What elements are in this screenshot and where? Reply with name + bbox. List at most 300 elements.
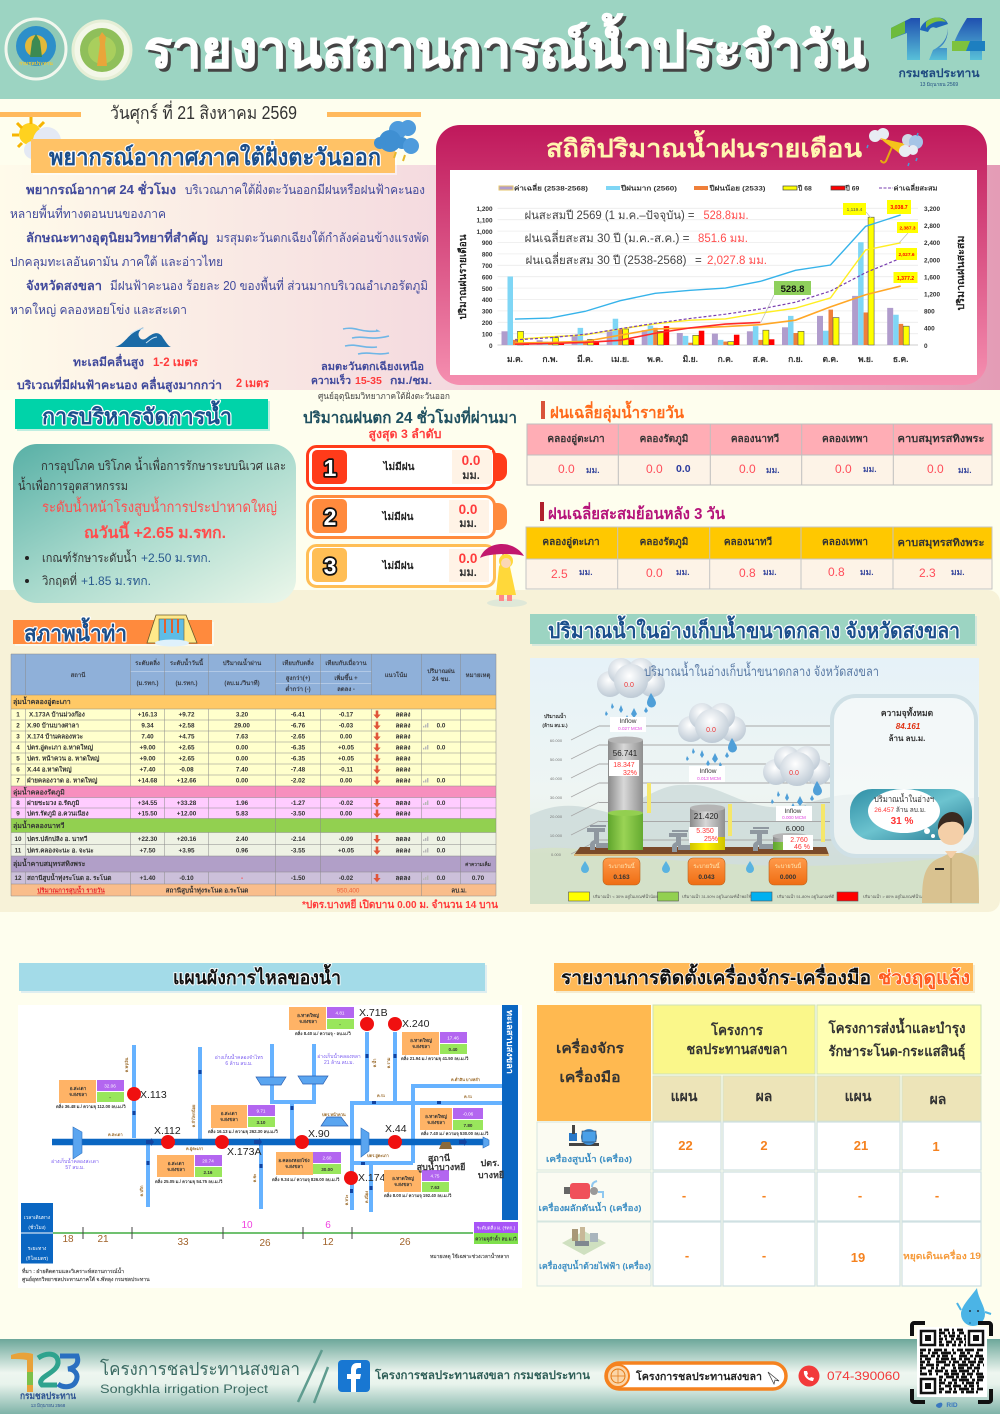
wind text (311, 360, 432, 387)
chart annotations: 528.8มม. (704, 210, 748, 222)
gauge data boxes: ตลิ่ง 8.40 ม./ ความจุ - ลบ.ม./วิ (295, 1030, 351, 1037)
table column headings: โครงการส่งน้ำและบำรุง (828, 1017, 966, 1037)
basin group 2: ปตร.รัตภูมิ อ.ควนเนียง (27, 810, 89, 818)
travel time and distance strip: (กิโลเมตร) (26, 1255, 48, 1262)
gauge points: X.90 (308, 1128, 330, 1140)
table header labels: (ม.รทก.) (136, 680, 159, 687)
reservoir 2 cylinder: 21.420 (694, 812, 719, 821)
left axis: 200 (482, 320, 493, 327)
table header labels: สูงกว่า(+) (286, 675, 310, 683)
strip legend (430, 1222, 518, 1260)
facebook page name: โครงการชลประทานสงขลา กรมชลประทาน (374, 1368, 590, 1382)
basin group 1: 7.40 (236, 766, 249, 774)
gauge data boxes: ตลิ่ง 16.13 ม./ ความจุ 262.30 ลบ.ม./วิ (208, 1128, 278, 1135)
logo: 124 years: 13 มิถุนายน 2569 (920, 81, 958, 88)
speech bubble: ปริมาณน้ำในอ่างฯ (874, 793, 934, 804)
basin group 3 (13, 819, 446, 855)
gauge data boxes: 7.63 (431, 1185, 440, 1190)
chart annotations: 851.6 มม. (698, 233, 748, 245)
chart annotations: ฝนสะสมปี 2569 (1 ม.ค.–ปัจจุบัน) = (524, 209, 695, 222)
volume axis: ปริมาณน้ำ (544, 712, 566, 720)
officer figure (922, 812, 979, 903)
chart legend: ปีฝนน้อย (2533) (709, 184, 766, 192)
table: daily basin rainfall: มม. (863, 464, 877, 474)
table column headings: ผล (756, 1088, 772, 1104)
table: three day rainfall: มม. (951, 567, 965, 577)
rain cloud 2 (678, 703, 746, 767)
gauge points (127, 1007, 430, 1185)
table header labels: เทียบกับตลิ่ง (282, 658, 314, 667)
table header labels: ระดับน้ำวันนี้ (170, 657, 204, 667)
basin group 1: -0.08 (179, 766, 194, 774)
basin group 4: +1.40 (140, 875, 156, 882)
panel: three day accumulated rainfall (526, 502, 992, 589)
travel time and distance strip: 21 (97, 1234, 109, 1245)
gauge data boxes (56, 1007, 489, 1199)
row: water pusher: เครื่องผลักดันน้ำ (เครื่อง) (538, 1201, 642, 1213)
speech bubble (868, 789, 940, 838)
gauge data boxes: อ.สะเดา (70, 1086, 87, 1091)
basin group 1: 7.63 (236, 734, 249, 740)
chart callouts: 528.8 (781, 284, 804, 295)
right axis: 2,400 (924, 240, 940, 247)
logo: 124 years: กรมชลประทาน (898, 67, 980, 80)
chart callouts (761, 200, 918, 322)
panel: reservoir infographic (530, 658, 979, 904)
table header labels: สถานี (71, 671, 86, 679)
reservoir 1 cylinder: 56.741 (613, 749, 638, 758)
gauge data boxes: จ.สงขลา (69, 1092, 87, 1097)
table: daily basin rainfall: คลองรัตภูมิ (640, 433, 688, 446)
wind text: กม./ชม. (390, 375, 432, 387)
month labels (507, 354, 909, 364)
rank 1: 1 (324, 455, 337, 481)
basin group 1: -2.02 (291, 778, 306, 784)
table column headings: ผล (930, 1091, 946, 1107)
rank 1: มม. (462, 470, 480, 482)
volume axis (542, 712, 832, 857)
basin group 1: -6.35 (291, 744, 306, 752)
travel time and distance strip: เวลาเดินทาง (24, 1215, 50, 1221)
travel time and distance strip: (ชั่วโมง) (28, 1224, 46, 1231)
volume axis: 20.000 (550, 814, 563, 819)
gauge points: X.44 (385, 1123, 407, 1135)
reservoir legend: ปริมาณน้ำ > 80% อยู่ในเกณฑ์น้ำมาก (863, 892, 928, 900)
gauge data boxes: อ.คลองหอยโข่ง (278, 1157, 310, 1163)
table: three day rainfall: คาบสมุทรสทิงพระ (898, 537, 984, 549)
basin group 1: +4.75 (179, 734, 195, 740)
chart annotations: 2,027.8 มม. (707, 255, 767, 267)
release buttons: ระบายวันนี้ (608, 862, 635, 870)
month labels: ส.ค. (753, 354, 768, 364)
row: water pusher: - (858, 1188, 862, 1203)
basin group 3: ปตร.ปลักปลิง อ. นาทวี (27, 835, 88, 843)
basin group 4: ค่าความเค็ม (465, 860, 491, 868)
table: daily basin rainfall: มม. (958, 465, 972, 475)
table header labels (71, 657, 490, 693)
panel: water management note: วิกฤตที่ (42, 572, 77, 588)
table column headings: เครื่องมือ (560, 1067, 620, 1085)
gauge data boxes: ตลิ่ง 21.94 ม./ ความจุ 41.50 ลบ.ม./วิ (401, 1055, 469, 1062)
basin group 1: -6.41 (291, 712, 306, 718)
right axis (924, 206, 967, 350)
inflow labels: 0.027 MCM (618, 726, 642, 731)
row: water pump: 21 (854, 1138, 868, 1153)
gauge data boxes: จ.สงขลา (167, 1167, 185, 1172)
basin group 1: 7.40 (141, 734, 154, 740)
month labels: พ.ค. (647, 354, 663, 364)
basin group 2: +34.55 (138, 800, 158, 807)
right axis: ปริมาณฝนสะสม (955, 236, 967, 310)
travel time and distance strip: 33 (177, 1237, 189, 1248)
website pill: โครงการชลประทานสงขลา (635, 1370, 762, 1383)
main river (52, 1054, 489, 1193)
reservoir 1 cylinder: 18.347 (613, 762, 635, 769)
chart callouts: 3,038.7 (890, 205, 908, 211)
daily pumping row: ปริมาณการสูบน้ำ รายวัน (37, 884, 105, 896)
basin group 1: +9.00 (140, 744, 156, 752)
basin group 1: +12.66 (177, 778, 197, 784)
QR code (912, 1323, 991, 1409)
forecast text: หลายพื้นที่ทางตอนบนของภาค (10, 204, 166, 221)
rank 2: 2 (324, 504, 336, 530)
reservoir 3 cylinder: 2.760 (790, 837, 808, 844)
basin group 1 (13, 695, 446, 785)
wave height text: บริเวณที่มีฝนฟ้าคะนอง คลื่นสูงมากกว่า (17, 376, 222, 393)
table: daily basin rainfall: คลองเทพา (822, 434, 868, 445)
panel: water management note: การอุปโภค บริโภค น้ำเพื่อการรักษาระบบนิเวศ และ (41, 456, 286, 474)
gauge data boxes: จ.สงขลา (220, 1117, 238, 1122)
table: three day rainfall: 2.5 (551, 567, 568, 581)
rain cloud 2: 0.0 (706, 727, 716, 734)
decorative slashes (298, 1350, 328, 1403)
title: รายงานสถานการณ์น้ำประจำวัน (144, 13, 866, 78)
bars (502, 217, 909, 345)
basin group 1: 0.0 (437, 778, 446, 784)
left axis: 0 (489, 343, 493, 350)
chart annotations: ฝนเฉลี่ยสะสม 30 ปี (2538-2568) (526, 252, 687, 267)
rank 2: ไม่มีฝน (382, 510, 414, 523)
row: electric pump: หยุดเดินเครื่อง 19 (903, 1249, 981, 1262)
panel: water management note (13, 444, 296, 603)
inflow labels (610, 717, 812, 821)
month labels: เม.ย. (611, 354, 629, 364)
basin group 1: X.174 บ้านคลองหวะ (27, 732, 83, 740)
table header labels: (ลบ.ม./วินาที) (224, 679, 260, 687)
table: river stations (11, 654, 496, 896)
river and reservoir labels: 57 ลบ.ม. (65, 1165, 85, 1171)
right axis: 800 (924, 309, 935, 316)
table: daily basin rainfall: คลองนาทวี (731, 433, 780, 445)
rank 2: 0.0 (459, 502, 477, 517)
table column headings: โครงการ (710, 1021, 763, 1038)
basin group 1: ปตร.อู่ตะเภา อ.หาดใหญ่ (27, 744, 94, 752)
table: three day rainfall: 0.0 (646, 566, 663, 580)
row: electric pump: - (762, 1248, 766, 1263)
daily pumping row: ลบ.ม. (451, 888, 467, 894)
gauge points: X.112 (154, 1125, 181, 1137)
month labels: ก.ย. (788, 354, 803, 364)
gauge data boxes: 3.10 (257, 1120, 266, 1125)
heading: equipment report: รายงานการติดตั้งเครื่องจักร-เครื่องมือ (561, 963, 871, 989)
table header labels: ต่ำกว่า (-) (285, 684, 311, 693)
month labels: ม.ค. (507, 354, 523, 364)
rank 2 (308, 496, 507, 538)
logo: 123 years (11, 1353, 78, 1409)
table: three day rainfall: คลองอู่ตะเภา (542, 536, 600, 549)
basin group 1: +2.58 (179, 722, 195, 730)
gauge data boxes: 9.71 (257, 1108, 266, 1114)
logo: 124 years (891, 17, 985, 88)
basin group 4 (13, 857, 491, 883)
heading: medium reservoirs (530, 614, 977, 646)
basin group 1: 7 (16, 778, 20, 784)
river and reservoir labels: อ่างเก็บน้ำคลองหลา (317, 1051, 361, 1060)
left axis: 1,000 (476, 229, 493, 236)
reservoir 2 cylinder: 5.350 (696, 828, 714, 835)
basin group 1: +2.65 (179, 744, 195, 752)
table header labels: (ม.รทก.) (175, 680, 198, 687)
songkhla lake bar (502, 1005, 518, 1220)
reservoir 2 cylinder: 25% (704, 836, 718, 843)
rank 3: 3 (324, 553, 336, 579)
river and reservoir labels: ค.ชะ (252, 1174, 257, 1182)
gauge points: X.173A (227, 1146, 261, 1158)
gauge points: X.240 (402, 1018, 430, 1030)
basin group 1: +14.68 (138, 778, 158, 784)
wind text: ลมตะวันตกเฉียงเหนือ (321, 360, 424, 373)
basin group 3: +3.95 (179, 848, 195, 854)
volume axis: 0.000 (551, 852, 562, 857)
table: three day rainfall: มม. (579, 567, 593, 577)
volume axis: 60.000 (550, 738, 563, 743)
icon: dam (147, 615, 197, 646)
gauge data boxes: จ.สงขลา (412, 1044, 430, 1049)
project name: Songkhla irrigation Project (100, 1382, 269, 1396)
table: daily basin rainfall: 0.0 (558, 462, 575, 476)
header band (0, 0, 1000, 99)
month labels: ธ.ค. (893, 354, 909, 364)
gauge data boxes: 0.40 (449, 1047, 458, 1052)
basin group 2: +15.50 (138, 810, 158, 818)
panel: water flow diagram (18, 1005, 522, 1288)
basin group 3: +20.16 (177, 836, 197, 843)
basin group 1: 4 (16, 744, 20, 752)
gauge data boxes: อ.หาดใหญ่ (297, 1012, 319, 1019)
chart: rainfall bars and cumulative lines (450, 170, 977, 375)
table: daily basin rainfall: 0.0 (835, 462, 852, 476)
basin group 4: 0.70 (472, 875, 485, 882)
reservoir 1 cylinder (608, 736, 651, 850)
basin group 2: ลดลง (396, 810, 410, 818)
left axis: 900 (482, 240, 493, 247)
panel: water management note: +1.85 ม.รทก. (81, 574, 151, 588)
basin group 1: 29.00 (234, 722, 250, 730)
icon: water pump (569, 1125, 599, 1146)
icon: water pusher (564, 1181, 603, 1199)
basin group 1: 2 (16, 722, 20, 730)
rank 1: ไม่มีฝน (383, 460, 415, 473)
gauge data boxes: 30.00 (321, 1167, 333, 1172)
right axis: 3,200 (924, 206, 940, 213)
release buttons: 0.163 (613, 874, 630, 881)
rain cloud 1: 0.0 (624, 682, 634, 689)
chart legend (499, 182, 938, 192)
river and reservoir labels: ค.จำไทรน้อย (190, 1104, 196, 1127)
wave height text (17, 353, 270, 393)
basin group 2 (13, 786, 446, 818)
basin group 1: 0.00 (340, 734, 353, 740)
basin group 2: +12.00 (177, 810, 197, 818)
left axis: 800 (482, 252, 493, 259)
gauge data boxes: 20.74 (202, 1158, 214, 1164)
basin group 4: สถานีสูบน้ำทุ่งระโนด อ. ระโนด (27, 872, 112, 883)
travel time and distance strip: 26 (259, 1238, 271, 1249)
table header labels: ปริมาณน้ำผ่าน (223, 657, 262, 667)
table: three day rainfall (526, 527, 992, 589)
basin group 3: -2.14 (291, 836, 306, 843)
icon: umbrella with clouds (867, 128, 923, 166)
gauge data boxes: 4.75 (431, 1174, 440, 1178)
row: electric pump (539, 1227, 981, 1272)
panel: three day accumulated rainfall: ฝนเฉลี่ยสะสมย้อนหลัง 3 วัน (548, 502, 725, 523)
reservoir legend (568, 892, 928, 901)
gauge data boxes: ตลิ่ง 25.05 ม./ ความจุ 54.75 ลบ.ม./วิ (155, 1178, 223, 1185)
basin group 1: 0.0 (437, 722, 446, 730)
icon: water drop mascot (957, 1288, 991, 1326)
table header labels: แนวโน้ม (385, 671, 407, 679)
basin group 4: -1.50 (291, 875, 306, 882)
basin group 1: 9.34 (141, 722, 154, 730)
right axis: 0 (924, 343, 928, 350)
chart legend: ค่าเฉลี่ยสะสม (894, 182, 938, 192)
forecast text: มีฝนฟ้าคะนอง ร้อยละ 20 ของพื้นที่ ส่วนมากบริเวณอำเภอรัตภูมิ (110, 276, 428, 294)
basin group 1: ลุ่มน้ำคลองอู่ตะเภา (13, 695, 71, 707)
heading: water management (15, 399, 270, 431)
basin group 3: ปตร.คลองจะนะ อ. จะนะ (27, 846, 94, 854)
river and reservoir labels: ค.สะเดา (108, 1132, 123, 1137)
rank 2: มม. (459, 518, 477, 530)
inflow labels: Inflow (700, 768, 717, 775)
gauge data boxes: 32.06 (104, 1084, 116, 1088)
gauge data boxes: จ.สงขลา (299, 1019, 317, 1024)
left axis: 600 (482, 274, 493, 281)
row: water pusher: - (935, 1188, 939, 1203)
travel time and distance strip (21, 1203, 473, 1264)
wave height text: ทะเลมีคลื่นสูง (73, 353, 144, 370)
river and reservoir labels: ค.พรุเงิน (124, 1057, 130, 1072)
forecast heading (31, 139, 397, 175)
basin group 3: ลดลง (396, 836, 410, 843)
table: three day rainfall: มม. (860, 567, 874, 577)
chart annotations (524, 209, 767, 267)
wind text: 15-35 (355, 375, 382, 387)
table: three day rainfall: คลองนาทวี (724, 536, 773, 548)
basin group 3: ลุ่มน้ำคลองนาทวี (13, 819, 65, 830)
table: three day rainfall: มม. (763, 567, 777, 577)
reservoir 2 cylinder (689, 804, 732, 850)
table: daily basin rainfall: มม. (766, 465, 780, 475)
total reservoir tank: ความจุทั้งหมด (881, 706, 934, 719)
basin group 1: -6.35 (291, 756, 306, 762)
left axis: 400 (482, 297, 493, 304)
rainfall heading: ปริมาณฝนตก 24 ชั่วโมงที่ผ่านมา (303, 406, 517, 427)
basin group 1: +0.05 (338, 744, 354, 752)
chart callouts: 1,377.2 (897, 276, 914, 282)
table: three day rainfall: 0.8 (739, 566, 756, 580)
river and reservoir labels: ค.หวะ (344, 1195, 349, 1205)
speech bubble: 31 % (891, 816, 914, 827)
row: water pump: เครื่องสูบน้ำ (เครื่อง) (546, 1152, 632, 1165)
icon: storm cloud (374, 120, 419, 161)
forecast text: บริเวณภาคใต้ฝั่งตะวันออกมีฝนหรือฝนฟ้าคะนอง (185, 181, 425, 197)
reservoir legend: ปริมาณน้ำ 51-80% อยู่ในเกณฑ์ดี (777, 892, 835, 900)
month labels: ก.ค. (718, 354, 733, 364)
left axis: 100 (482, 331, 493, 338)
footer band (0, 1288, 1000, 1414)
gauge data boxes: ตลิ่ง 7.40 ม./ ความจุ 530.00 ลบ.ม./วิ (421, 1130, 489, 1137)
panel: top three 24 hour rainfall (303, 406, 517, 586)
chart legend: ค่าเฉลี่ย (2538-2568) (514, 182, 588, 192)
basin group 1: 0.00 (236, 744, 249, 752)
river and reservoir labels (51, 1051, 480, 1205)
diagram source (21, 1266, 150, 1284)
icon: facebook (338, 1360, 370, 1392)
row: water pump (546, 1125, 940, 1165)
basin group 1: X.44 อ.หาดใหญ่ (27, 766, 72, 774)
table header labels: 24 ชม. (432, 676, 450, 683)
title: รายงานสถานการณ์น้ำประจำวัน (147, 16, 869, 81)
chart annotations: ฝนเฉลี่ยสะสม 30 ปี (ม.ค.-ส.ค.) = (524, 230, 690, 245)
month labels: พ.ย. (858, 354, 873, 364)
basin group 1: -6.76 (291, 722, 306, 730)
basin group 3: ลดลง (396, 848, 410, 854)
right axis: 400 (924, 326, 935, 333)
basin group 1: 0.00 (236, 756, 249, 762)
basin group 3: 0.0 (437, 836, 446, 843)
basin group 2: 5.83 (236, 810, 249, 818)
table: equipment installation (537, 1005, 981, 1286)
website pill (606, 1363, 786, 1389)
right axis: 2,000 (924, 257, 940, 264)
basin group 1: ลดลง (396, 756, 410, 762)
logo: royal irrigation department: กรมชลประทาน (19, 60, 53, 67)
basin group 2: 0.0 (437, 800, 446, 807)
gauge data boxes: จ.สงขลา (427, 1120, 445, 1125)
gauge data boxes: -0.06 (463, 1112, 474, 1116)
row: electric pump: เครื่องสูบน้ำด้วยไฟฟ้า (เครื่อง) (539, 1259, 651, 1272)
basin group 1: -7.48 (291, 766, 306, 774)
row: water pump: 1 (932, 1139, 940, 1154)
rank 3: ไม่มีฝน (382, 559, 414, 572)
logo: 123 years: 13 มิถุนายน 2568 (31, 1403, 66, 1409)
gauge points: X.174 (358, 1172, 386, 1184)
table column headings: รักษาระโนด-กระแสสินธุ์ (828, 1042, 966, 1060)
strip legend: หมายเหตุ ใช้เฉพาะช่วงเวลาน้ำหลาก (430, 1251, 509, 1260)
basin group 4: -0.10 (179, 875, 194, 882)
basin group 1: +9.72 (179, 712, 195, 718)
icon: girl with umbrella (480, 544, 527, 607)
release buttons: ระบายวันนี้ (693, 862, 720, 870)
left axis: 1,100 (476, 217, 493, 224)
basin group 4: 12 (14, 875, 22, 882)
left axis: 700 (482, 263, 493, 270)
phone (798, 1366, 900, 1386)
row: water pump: 2 (760, 1138, 768, 1153)
daily pumping row: 950,400 (337, 888, 360, 894)
wave height text: 2 เมตร (236, 378, 270, 390)
rain cloud 1 (597, 658, 665, 722)
